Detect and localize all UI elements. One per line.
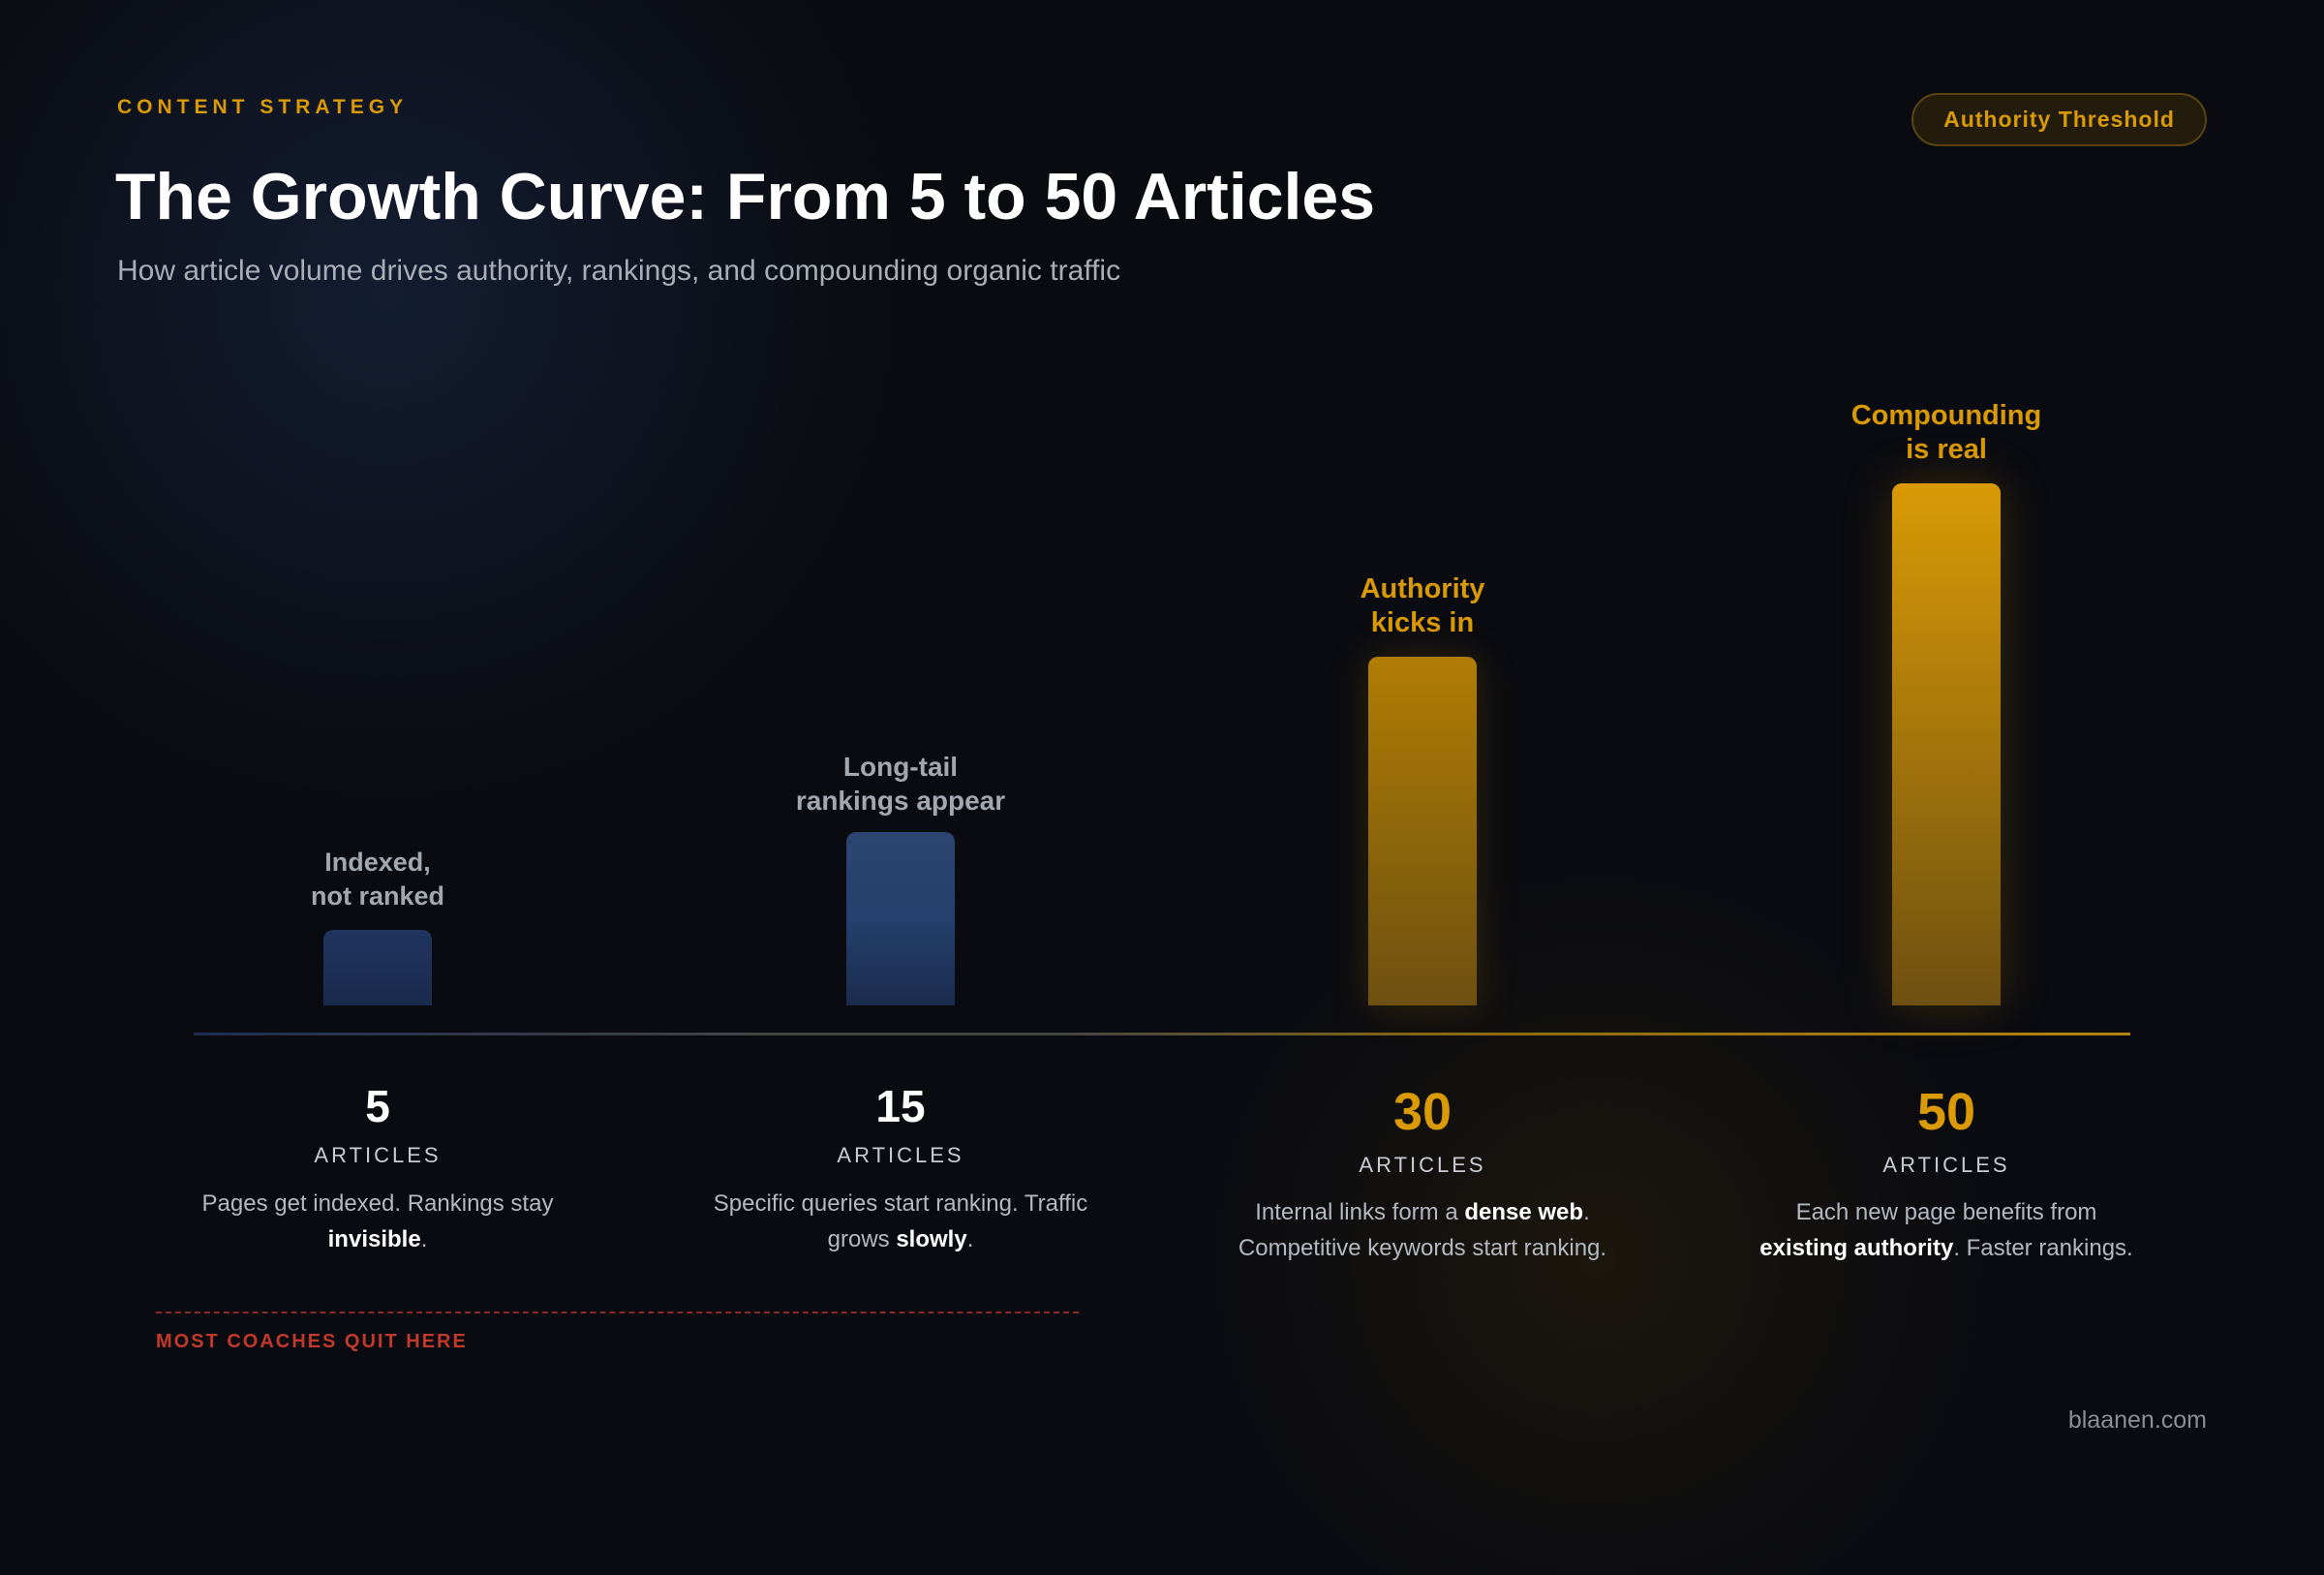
stage 50 xyxy=(1759,1083,2133,1261)
bar 50 xyxy=(1892,483,2001,1005)
bar label 50 xyxy=(1851,400,2041,465)
bar label 50: Compounding xyxy=(1851,400,2041,431)
stage 30: ARTICLES xyxy=(1359,1153,1486,1177)
stage 15: Specific queries start ranking. Traffic xyxy=(714,1190,1087,1217)
title: The Growth Curve: From 5 to 50 Articles xyxy=(115,160,1375,233)
subtitle: How article volume drives authority, rankings, and compounding organic traffic xyxy=(117,255,1120,287)
bar label 5 xyxy=(311,848,444,911)
badge: authority threshold: Authority Threshold xyxy=(1943,107,2175,132)
stage 5: 5 xyxy=(365,1081,390,1131)
bar label 5: not ranked xyxy=(311,881,444,911)
stage 15: 15 xyxy=(875,1081,926,1131)
bar label 30 xyxy=(1361,573,1485,638)
stage 5: invisible. xyxy=(328,1226,427,1252)
stage 30 xyxy=(1238,1083,1606,1261)
stage 5 xyxy=(202,1081,554,1252)
bar label 15: Long-tail xyxy=(843,752,958,782)
stage 5: Pages get indexed. Rankings stay xyxy=(202,1190,553,1217)
bar 5 xyxy=(323,930,432,1005)
eyebrow: CONTENT STRATEGY xyxy=(117,96,408,118)
bar label 15: rankings appear xyxy=(796,786,1005,816)
bar 15 xyxy=(846,832,955,1005)
stage 30: Competitive keywords start ranking. xyxy=(1238,1235,1606,1261)
bar label 5: Indexed, xyxy=(324,848,431,877)
stage 50: Each new page benefits from xyxy=(1796,1199,2096,1225)
bar label 50: is real xyxy=(1906,434,1987,465)
bar label 15 xyxy=(796,752,1005,816)
stage 30: Internal links form a dense web. xyxy=(1255,1199,1590,1225)
stage 50: ARTICLES xyxy=(1882,1153,2010,1177)
badge: authority threshold xyxy=(1911,93,2207,146)
stage 30: 30 xyxy=(1393,1083,1452,1141)
stage 15 xyxy=(714,1081,1087,1252)
axis line xyxy=(194,1033,2130,1035)
stage 5: ARTICLES xyxy=(314,1143,442,1167)
stage 50: existing authority. Faster rankings. xyxy=(1759,1235,2133,1261)
bar 30 xyxy=(1368,657,1477,1005)
quit label: MOST COACHES QUIT HERE xyxy=(156,1331,468,1352)
stage 15: ARTICLES xyxy=(837,1143,964,1167)
quit line xyxy=(156,1312,1079,1313)
stage 50: 50 xyxy=(1917,1083,1975,1141)
bar label 30: kicks in xyxy=(1371,607,1474,638)
stage 15: grows slowly. xyxy=(828,1226,973,1252)
bar label 30: Authority xyxy=(1361,573,1484,604)
footer brand: blaanen.com xyxy=(2068,1406,2207,1434)
